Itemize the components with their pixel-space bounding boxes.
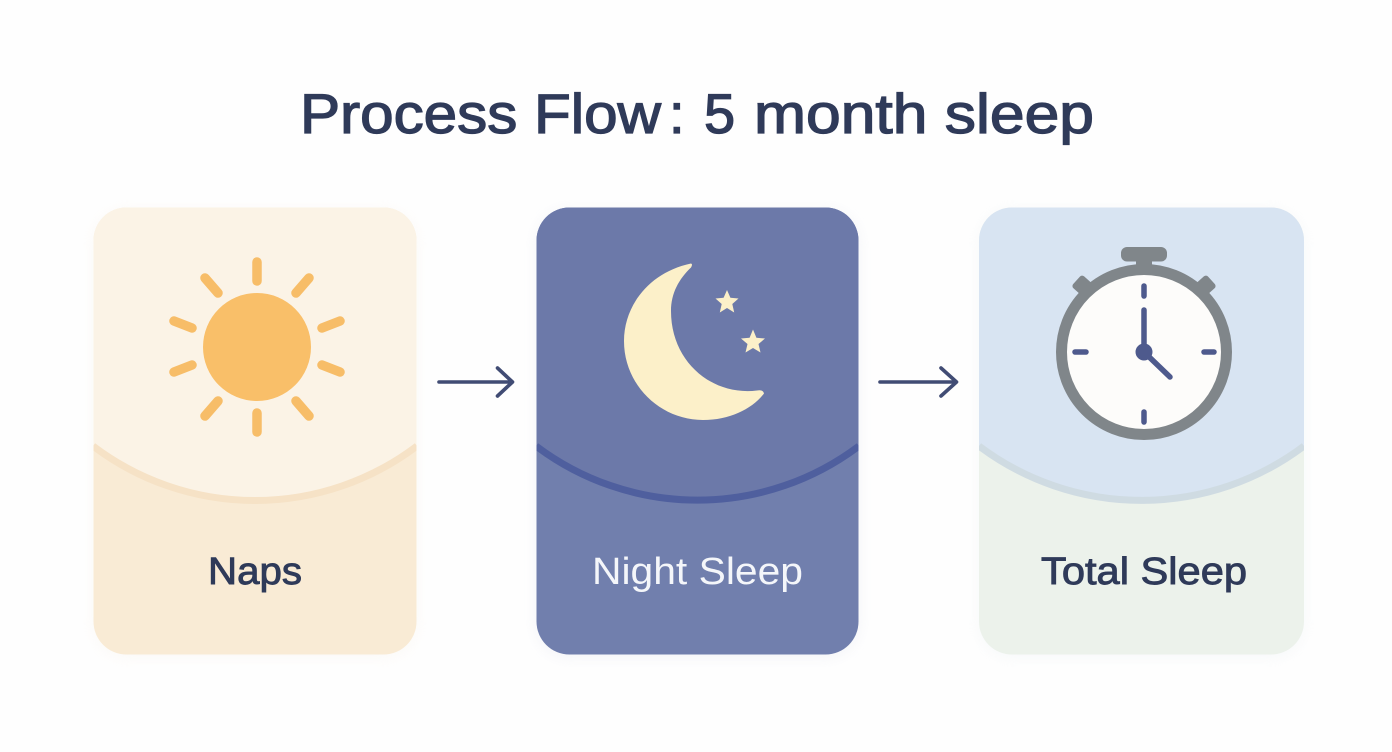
icon: sun (174, 262, 340, 432)
title: Process Flow (300, 82, 662, 145)
label: total sleep: Total Sleep (1041, 551, 1247, 593)
title: 5 (704, 82, 735, 145)
icon: stopwatch (1062, 247, 1226, 434)
panel: total sleep (979, 207, 1304, 657)
title: : (669, 82, 685, 145)
label: naps: Naps (208, 551, 302, 593)
arrow: night sleep to total sleep (880, 368, 956, 396)
arrow: naps to night sleep (439, 368, 512, 396)
title: month sleep (754, 82, 1094, 145)
icon: upper star (716, 290, 738, 312)
icon: crescent moon (624, 264, 764, 420)
panel: naps (93, 207, 417, 657)
panel: night sleep (536, 207, 859, 657)
label: night sleep: Night Sleep (592, 551, 803, 593)
icon: lower star (741, 330, 765, 352)
